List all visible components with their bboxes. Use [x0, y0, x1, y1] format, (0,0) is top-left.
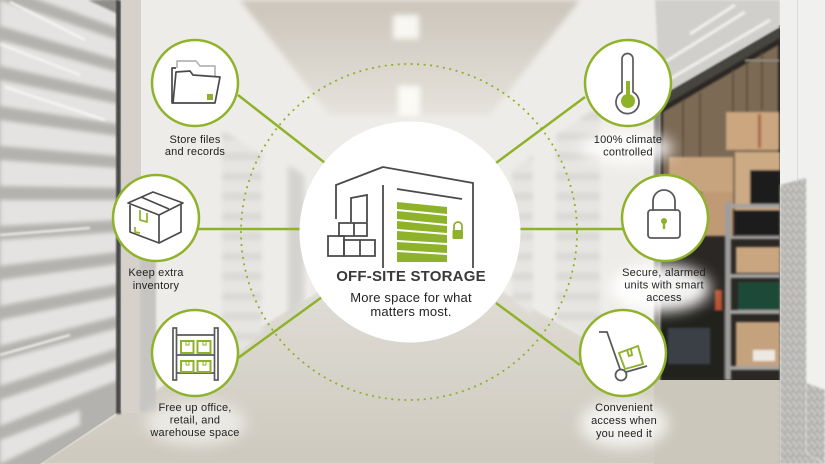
connector lines	[198, 95, 623, 365]
label: 100% climate	[594, 134, 662, 146]
background photo: open storage unit with boxes	[654, 0, 825, 464]
panel: store files and records	[152, 40, 238, 158]
heading: OFF-SITE STORAGE	[336, 268, 486, 285]
background photo: left roller shutter	[0, 0, 156, 464]
panel: convenient access	[580, 310, 666, 440]
label: Secure, alarmed	[622, 267, 706, 279]
panel: convenient access: you need it	[596, 428, 652, 440]
icon: folder	[172, 61, 220, 103]
icon: green padlock	[452, 222, 463, 239]
body text: More space for what	[350, 290, 472, 305]
panel: free up space: warehouse space	[149, 427, 240, 439]
panel: climate controlled: controlled	[603, 146, 653, 158]
panel: central off-site storage circle	[300, 122, 520, 342]
icon: shelves with boxes	[173, 328, 218, 380]
panel: climate controlled	[585, 40, 671, 158]
icon: storage building	[328, 167, 473, 268]
dotted orbit circle	[241, 64, 577, 400]
icon: hand truck	[599, 332, 647, 380]
text glow panels behind labels	[146, 132, 710, 448]
panel: keep extra inventory	[113, 175, 199, 292]
label: Free up office,	[158, 402, 232, 414]
panel: secure units	[622, 175, 708, 304]
panel: convenient access: access when	[591, 415, 657, 427]
panel: free up space	[149, 310, 240, 439]
panel: keep extra inventory: inventory	[133, 280, 180, 292]
label: Keep extra	[128, 267, 184, 279]
panel: secure units: access	[646, 292, 682, 304]
icon: green roller door	[397, 202, 447, 262]
panel: secure units: units with smart	[624, 280, 704, 292]
label: Store files	[169, 134, 221, 146]
panel: store files and records: and records	[165, 146, 225, 158]
icon: thermometer	[616, 54, 639, 114]
panel: central off-site storage circle: matters most.	[370, 304, 452, 319]
icon: padlock	[648, 190, 680, 238]
panel: free up space: retail, and	[170, 414, 220, 426]
label: Convenient	[595, 402, 653, 414]
icon: cardboard box	[128, 192, 183, 243]
